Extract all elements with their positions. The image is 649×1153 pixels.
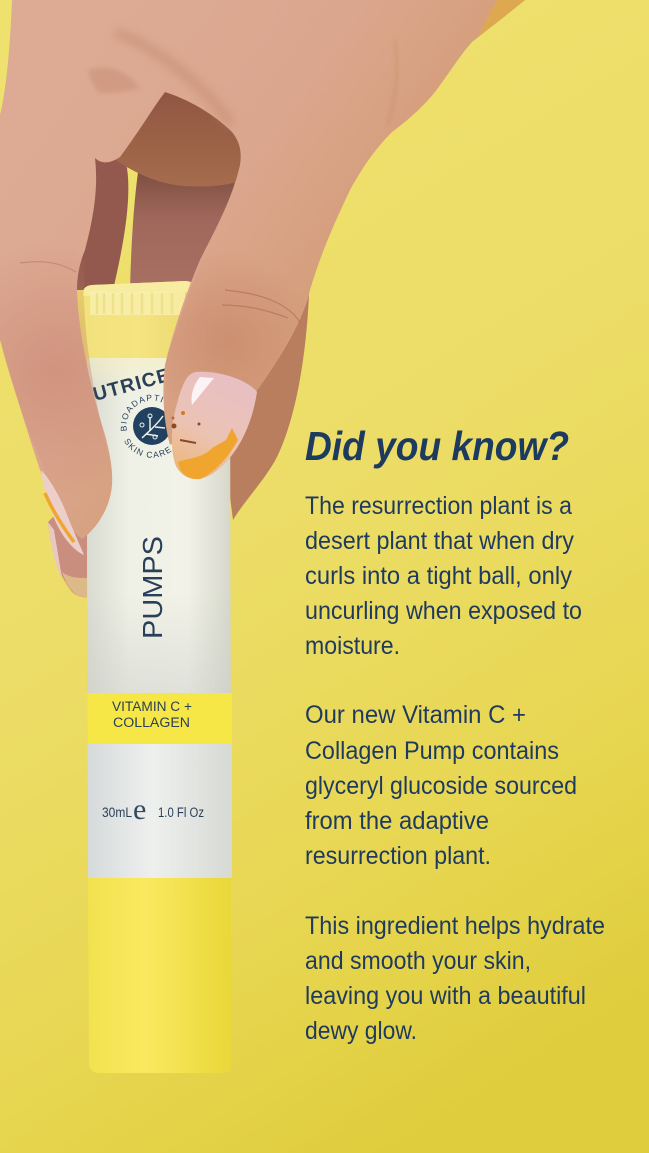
paragraph 2: Collagen Pump contains bbox=[305, 737, 559, 765]
paragraph 2: Our new Vitamin C + bbox=[305, 701, 526, 729]
hand: rear fingers bbox=[70, 70, 309, 520]
hand: rear finger behind tube bbox=[130, 172, 238, 290]
paragraph 1: moisture. bbox=[305, 632, 400, 660]
tube: yellow band bbox=[88, 693, 232, 744]
tube: frosted lower sleeve bbox=[88, 744, 232, 878]
paragraph 3 bbox=[305, 912, 605, 1045]
paragraph 1: uncurling when exposed to bbox=[305, 597, 582, 625]
tube: band label: VITAMIN C + bbox=[112, 699, 192, 714]
paragraph 2: resurrection plant. bbox=[305, 842, 491, 870]
paragraph 3: leaving you with a beautiful bbox=[305, 982, 586, 1010]
tube: volume label bbox=[102, 793, 204, 826]
hand: wrist edge bbox=[478, 0, 525, 36]
heading: Did you know? bbox=[305, 423, 569, 469]
hand: inner palm shadow bbox=[100, 70, 265, 187]
paragraph 2: glyceryl glucoside sourced bbox=[305, 772, 577, 800]
product tube bbox=[83, 281, 232, 1073]
tube: brand name: UTRICE bbox=[91, 364, 173, 406]
tube: volume label: 1.0 Fl Oz bbox=[158, 805, 204, 820]
tube: volume label: 30mL bbox=[102, 805, 132, 820]
hand: left finger nail bbox=[41, 470, 84, 555]
hand: web fold bbox=[88, 67, 140, 93]
paragraph 1: curls into a tight ball, only bbox=[305, 562, 572, 590]
hand: index finger shading bbox=[0, 235, 112, 539]
paragraph 2 bbox=[305, 701, 577, 870]
hand: wrist crease bbox=[388, 40, 397, 125]
tube: body bbox=[87, 345, 231, 880]
tube: badge icon bbox=[120, 394, 172, 458]
tube: band label: COLLAGEN bbox=[113, 715, 190, 730]
paragraph 3: dewy glow. bbox=[305, 1017, 417, 1045]
tube: badge icon: SKIN CARE bbox=[124, 438, 172, 458]
hand: lower finger tip and nail bbox=[48, 500, 87, 597]
tube: PUMPS vertical label: PUMPS bbox=[137, 536, 168, 639]
hand: palm fold shadow bbox=[115, 32, 232, 125]
hand: rear finger beside thumb bbox=[226, 295, 309, 520]
paragraph 1: The resurrection plant is a bbox=[305, 492, 572, 520]
hand: thumb nail bbox=[172, 372, 257, 479]
hand: palm, index finger and thumb bbox=[0, 0, 525, 539]
paragraph 3: This ingredient helps hydrate bbox=[305, 912, 605, 940]
hand: knuckle creases bbox=[222, 290, 300, 322]
paragraph 2: from the adaptive bbox=[305, 807, 489, 835]
hand: front skin bbox=[0, 0, 525, 597]
tube: volume label: e bbox=[133, 793, 146, 826]
hand: thumb shading bbox=[165, 170, 310, 445]
hand: rear finger beside index bbox=[70, 140, 128, 290]
paragraph 3: and smooth your skin, bbox=[305, 947, 531, 975]
tube: cap bbox=[83, 281, 195, 358]
tube: band label bbox=[112, 699, 192, 730]
paragraph 1 bbox=[305, 492, 582, 660]
paragraph 1: desert plant that when dry bbox=[305, 527, 574, 555]
tube: yellow base bbox=[88, 878, 231, 1073]
